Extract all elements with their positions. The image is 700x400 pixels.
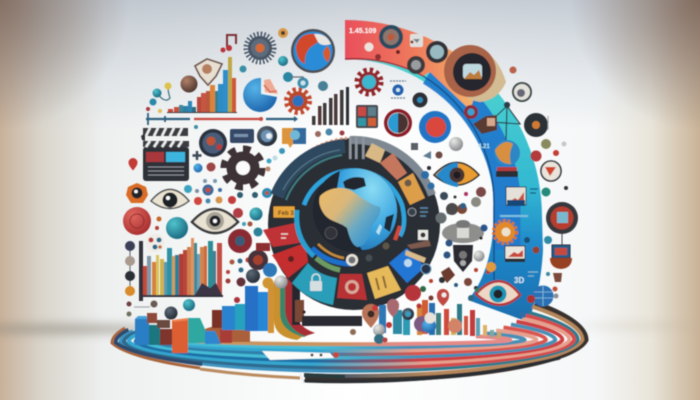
icon: monitor on bowl (550, 245, 572, 269)
panel: right curved band (345, 20, 543, 322)
pins and bars cluster: centre bottom (302, 285, 526, 344)
wedge: blue (389, 248, 431, 283)
wedge: orange label tab (273, 206, 295, 218)
icon: right-of-wheel dots (429, 197, 490, 290)
icon: red sun gear (287, 90, 309, 112)
icon: teal sphere (166, 217, 188, 239)
globe (313, 168, 397, 252)
icon: ornament balls left of wheel (246, 243, 288, 288)
icon: red blue button (384, 109, 412, 137)
icon: brown ball (180, 76, 198, 92)
wedge: salmon tab (380, 153, 407, 180)
balls (302, 286, 526, 344)
icon: dark red disc (228, 229, 252, 253)
icon: dark red circle with picture (546, 202, 578, 245)
bar chart: dark rising bars (312, 87, 349, 125)
pin: red orb (405, 285, 449, 306)
band label: 3D: 3D (514, 276, 524, 285)
icon: plus (192, 151, 202, 160)
icon: dark button (524, 113, 548, 137)
chart: blue pie (243, 78, 278, 112)
icon: dark shield with eyes (453, 245, 473, 272)
icon: triangle tripod (490, 102, 520, 140)
icon: red sun (358, 71, 380, 93)
icon: eye centre (192, 209, 238, 233)
icon: small coral decorations (364, 40, 414, 60)
floor swirl stripes (112, 303, 586, 380)
wheel inner arcs (297, 170, 404, 270)
timeline arrows (146, 113, 298, 125)
icon: scattered balls (194, 125, 344, 172)
icon: red eye (476, 281, 520, 305)
icon: dotted white ball (146, 234, 164, 252)
icon: blue red button (419, 111, 451, 143)
wedge: orange tab (398, 173, 425, 205)
icon: blue dot disc (464, 105, 478, 119)
bar chart: top (167, 57, 237, 113)
icon: small items near eye (411, 143, 486, 200)
icon: clapperboard (141, 128, 189, 181)
icon: gear (224, 149, 262, 187)
icon: dark circle map (199, 129, 227, 157)
wheel base (268, 138, 440, 310)
icon: big lens (444, 45, 506, 102)
icon: shield (195, 59, 222, 85)
icon: orb right of lens (510, 66, 516, 74)
icon: dark sunburst (246, 34, 274, 62)
icon: grey knob (449, 137, 463, 151)
wedge: red upper (263, 223, 305, 247)
icon: grey ring (512, 82, 532, 102)
icon: teal cogs (240, 66, 328, 91)
wedge: yellow pause (367, 266, 401, 299)
icon: dark rosette (412, 92, 428, 108)
icon: red pin (128, 158, 138, 170)
icon: blue target (390, 81, 406, 98)
icon: orange eye badge (126, 183, 148, 203)
wedge: beige tab (365, 143, 385, 163)
icon: grey pill with eye (436, 212, 484, 243)
3D bars: blue towers (222, 286, 268, 331)
icon: small orange ring (278, 28, 288, 38)
icon: teal dot (278, 56, 288, 66)
wheel drip ribbons (268, 270, 362, 340)
icon: linked balls (146, 82, 172, 113)
icon: dark circle on band (426, 41, 448, 63)
icon: eye left upper (151, 190, 189, 208)
icon: vertical dot column (125, 241, 135, 316)
icon: globe on stand (494, 140, 520, 177)
band label: value: 4.21 (478, 144, 490, 150)
icon: orange pebble (486, 262, 496, 272)
bar chart: large multi-colour (139, 238, 223, 301)
icon: top globe (291, 29, 335, 73)
icon: row of balls (134, 297, 240, 311)
3D bars: left floor group (135, 306, 250, 353)
wheel: grey divider strips (349, 137, 364, 159)
wheel: small icons on dark rim (325, 171, 434, 266)
pin: rose (387, 299, 399, 317)
wedge: orange label tab: Feb 3 (278, 211, 294, 217)
icon: ticket tag (230, 129, 254, 143)
icon: side orbs (530, 139, 568, 196)
icon: blue dotted globe (527, 286, 554, 306)
icon: chart monitor (506, 187, 538, 205)
icon: orange blue eye (434, 162, 479, 187)
icon: speech bubble (282, 128, 306, 148)
wedge: red lower (272, 243, 308, 278)
icon: small dots by eye (155, 208, 262, 286)
icon: steel circle (257, 126, 277, 146)
pin: brown (362, 304, 379, 328)
icon: white tile (410, 34, 423, 47)
wedge: teal padlock (292, 263, 337, 305)
icon: music note (220, 35, 236, 52)
wedge: red play (337, 274, 367, 300)
icon: camera (473, 115, 497, 134)
icon: quad tile (356, 105, 378, 128)
icon: band decoration items (446, 200, 562, 298)
bar group (379, 300, 501, 338)
icon: red sphere (123, 207, 151, 235)
floor swirl front edge (200, 351, 560, 384)
chart: central wheel (263, 137, 440, 310)
icon: grey disc on band (407, 56, 425, 74)
icon: coral band circle (379, 25, 403, 49)
icon: play badge (541, 161, 561, 181)
band label: figures: 1.45.109 (349, 28, 376, 35)
icon: orange sun on band (494, 221, 516, 243)
icon: dark monitor chart (505, 246, 525, 262)
icon: dot cluster (184, 179, 272, 218)
